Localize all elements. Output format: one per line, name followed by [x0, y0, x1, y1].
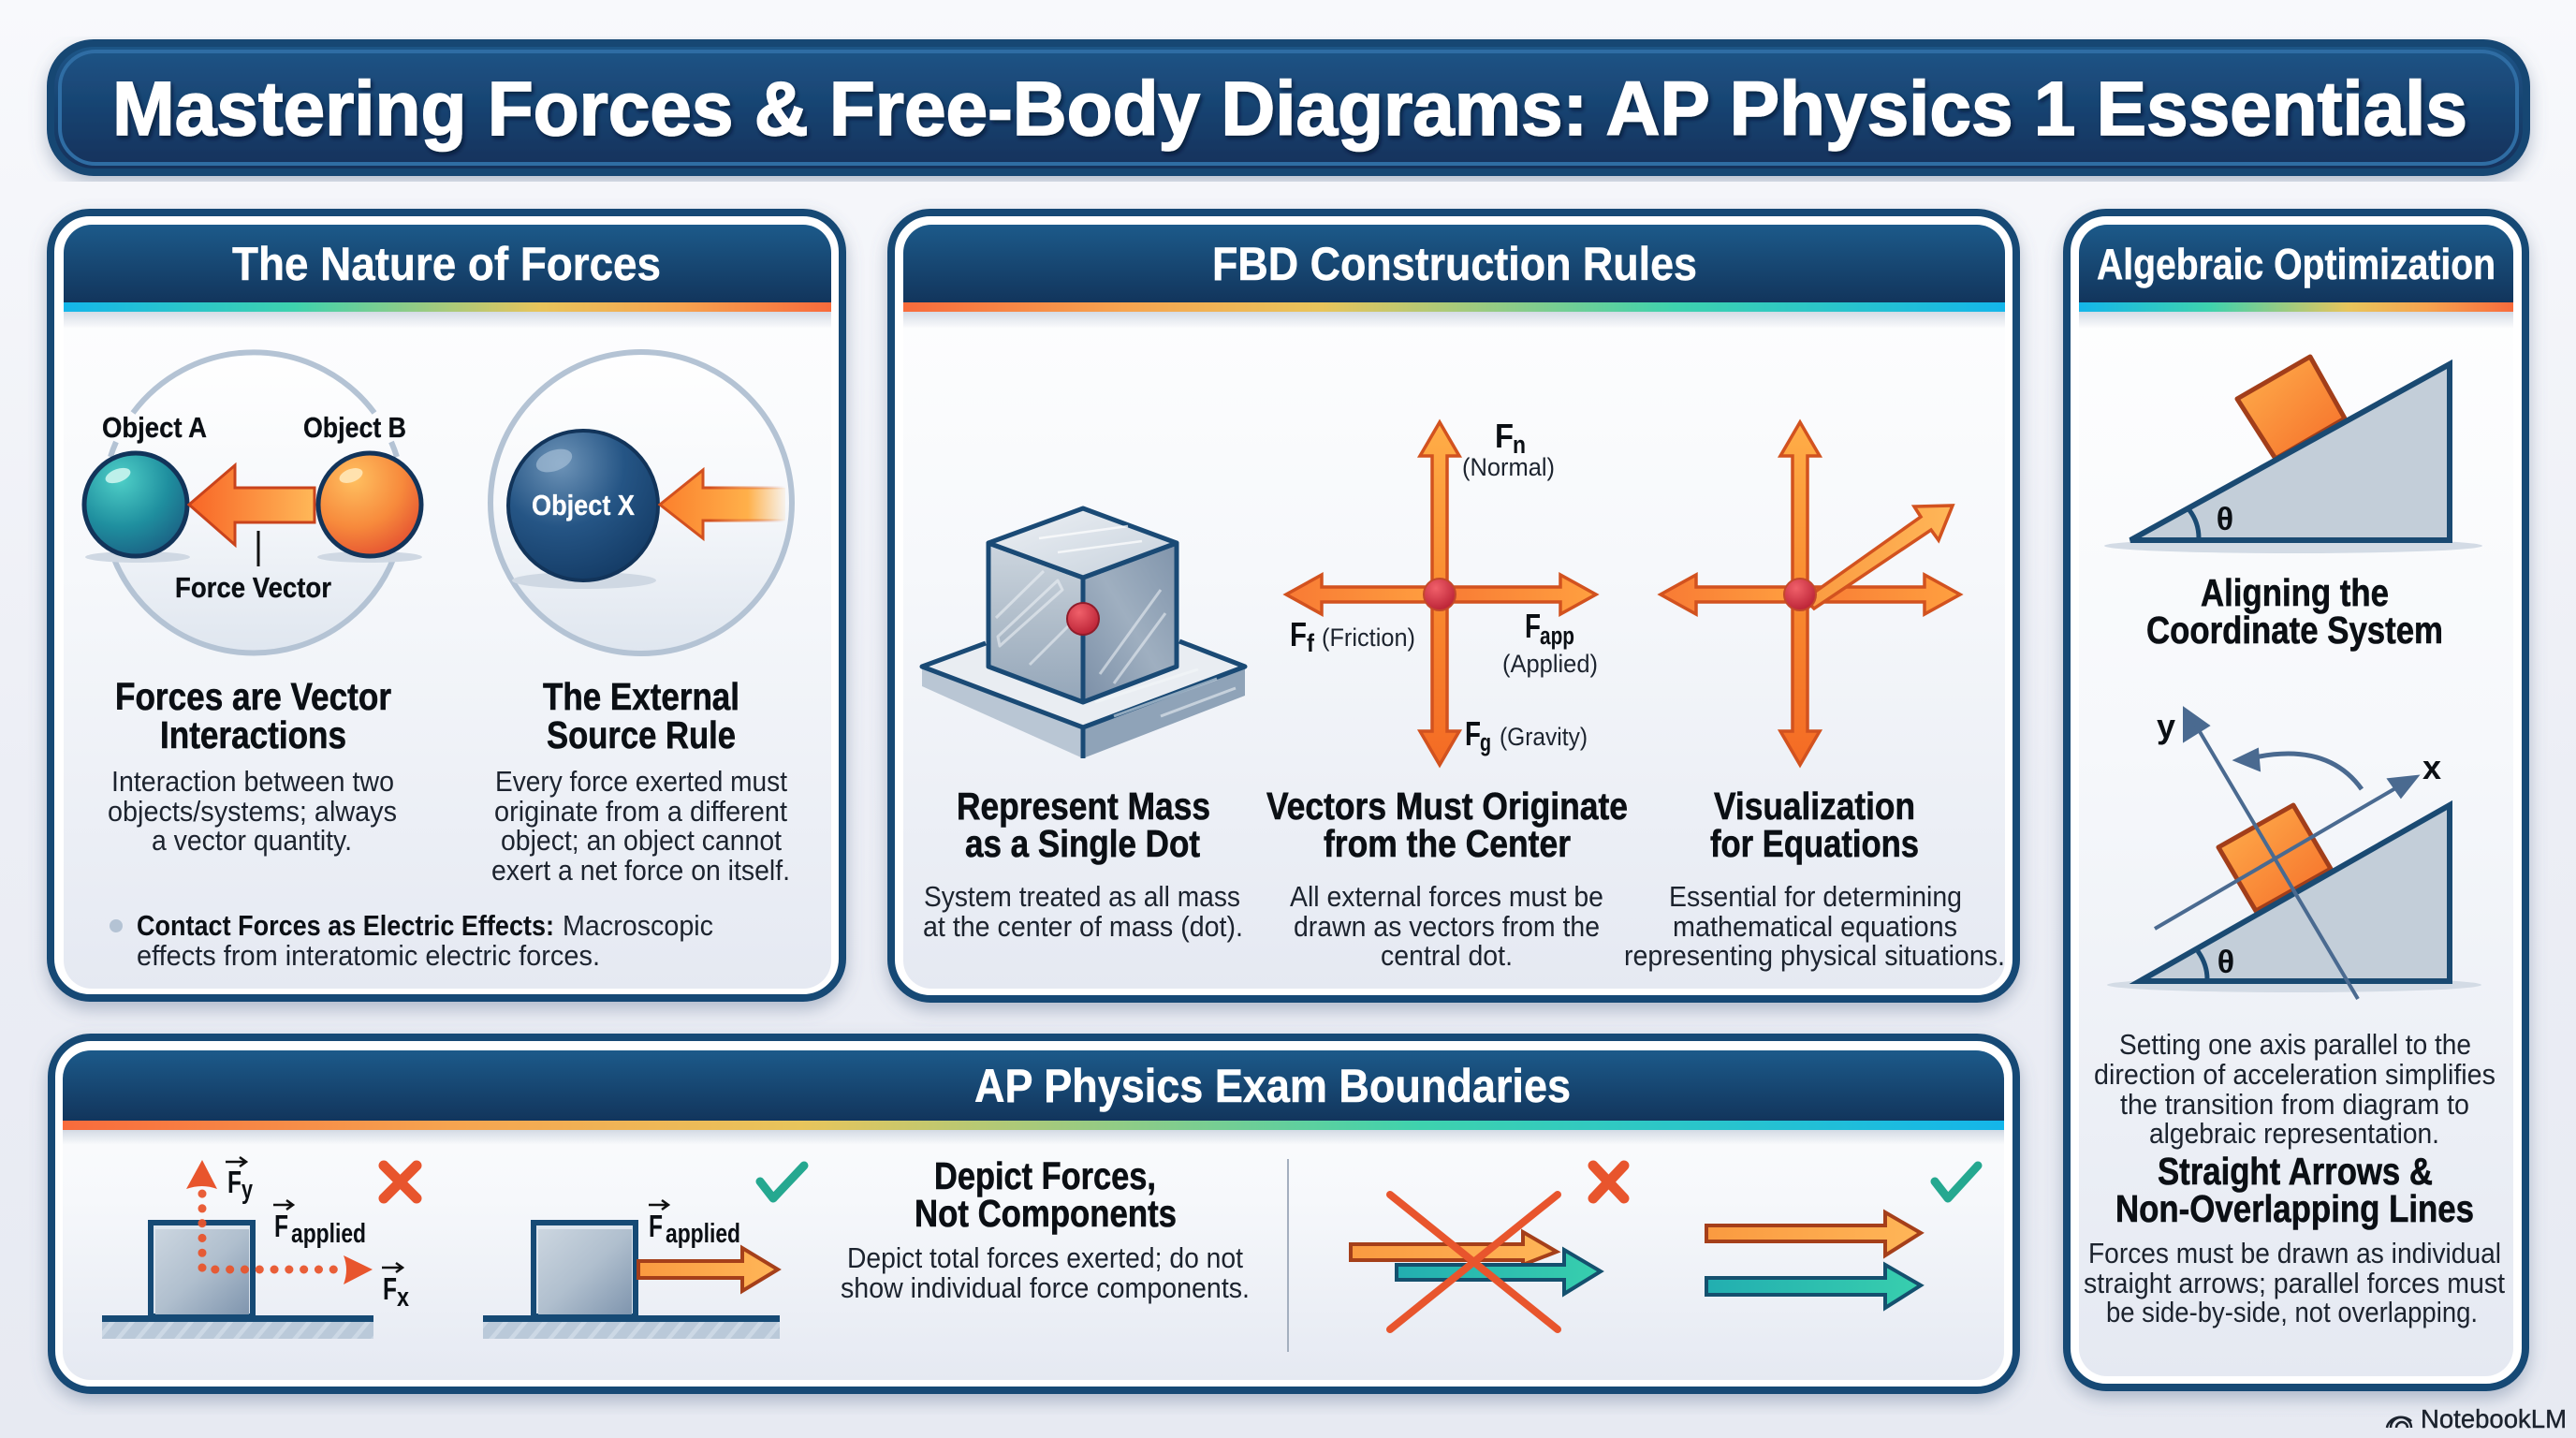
- diagram: incline with block: θ: [2217, 502, 2233, 537]
- label: gravity force: (Gravity): [1500, 723, 1588, 751]
- diagram: correct total force: [483, 1166, 804, 1339]
- text block: Forces are Vector Interactions: a vector quantity.: [152, 824, 352, 857]
- text block: Represent Mass as a Single Dot: System treated as all mass: [924, 880, 1240, 913]
- label: F applied: [649, 1200, 740, 1249]
- text block: Represent Mass as a Single Dot: at the center of mass (dot).: [923, 910, 1243, 943]
- label: friction force: (Friction): [1322, 624, 1415, 652]
- panel: AP Physics Exam Boundaries: [51, 1037, 2016, 1390]
- icon: green check: [760, 1166, 804, 1198]
- text block: The External Source Rule: Every force exerted must: [495, 765, 787, 798]
- text block: Forces are Vector Interactions: Interactions: [160, 713, 346, 756]
- label: Object B: Object B: [303, 411, 406, 444]
- label: friction force: f: [1307, 629, 1315, 657]
- text block: Visualization for Equations: for Equations: [1710, 822, 1919, 865]
- text block: axis explanation: direction of acceleration simplifies: [2094, 1058, 2496, 1091]
- watermark: NotebookLM: NotebookLM: [2421, 1404, 2567, 1433]
- arrow: normal force: [1420, 422, 1459, 594]
- arrow: external force: [660, 470, 785, 538]
- icon: sphere object A: [84, 453, 187, 556]
- label: normal force: n: [1513, 431, 1526, 459]
- arrow: friction force: [1286, 575, 1440, 614]
- text block: Forces are Vector Interactions: Interaction between two: [111, 765, 394, 798]
- panel heading: Algebraic Optimization: [2079, 225, 2513, 312]
- label: applied force: [1502, 607, 1598, 678]
- text block: Represent Mass as a Single Dot: Represent Mass: [957, 785, 1210, 828]
- text block: Vectors Must Originate from the Center: drawn as vectors from the: [1294, 910, 1600, 943]
- text block: Straight Arrows and Non-Overlapping Lines: [2084, 1150, 2505, 1328]
- diagram: incorrect force components: [102, 1157, 417, 1339]
- text block: axis explanation: the transition from diagram to: [2120, 1088, 2469, 1121]
- text block: Represent Mass as a Single Dot: [923, 785, 1243, 943]
- icon: red cross: [1593, 1166, 1624, 1198]
- label: normal force: (Normal): [1462, 453, 1555, 481]
- text block: Forces are Vector Interactions: Forces are Vector: [115, 675, 391, 718]
- text block: Depict Forces, Not Components: [841, 1154, 1250, 1304]
- arrow: force vector: [189, 465, 315, 545]
- panel heading: FBD Construction Rules: FBD Construction Rules: [1212, 238, 1697, 290]
- panel heading: The Nature of Forces: The Nature of Forces: [232, 238, 661, 290]
- diagram: overlapping arrows crossed out: [1351, 1166, 1624, 1329]
- arrow: applied force: [638, 1248, 778, 1291]
- panel heading: AP Physics Exam Boundaries: [63, 1050, 2004, 1130]
- icon: red cross: [384, 1166, 417, 1198]
- text block: Straight Arrows and Non-Overlapping Lines: Non-Overlapping Lines: [2115, 1187, 2474, 1230]
- icon: sphere object B: [318, 453, 421, 556]
- label: Object A: Object A: [102, 411, 207, 444]
- text block: Visualization for Equations: Visualization: [1714, 785, 1915, 828]
- diagram: incline with block: [2104, 357, 2482, 553]
- text block: Vectors Must Originate from the Center: from the Center: [1324, 822, 1571, 865]
- text block: Vectors Must Originate from the Center: central dot.: [1381, 939, 1513, 972]
- text block: The External Source Rule: Source Rule: [547, 713, 736, 756]
- arrow: rotation: [2234, 749, 2362, 789]
- text block: Depict Forces, Not Components: show individual force components.: [841, 1271, 1250, 1304]
- arrow: gravity force: [1420, 594, 1459, 765]
- label: F applied: F: [649, 1209, 663, 1243]
- text block: axis explanation: Setting one axis parallel to the: [2119, 1028, 2471, 1061]
- text block: Vectors Must Originate from the Center: Vectors Must Originate: [1266, 785, 1628, 828]
- icon: green check: [1935, 1166, 1978, 1198]
- text block: Vectors Must Originate from the Center: All external forces must be: [1290, 880, 1603, 913]
- text block: The External Source Rule: The External: [543, 675, 739, 718]
- arrow: y axis: [2185, 710, 2358, 999]
- bullet: contact forces as electric effects: Contact Forces as Electric Effects:: [137, 909, 554, 942]
- label: F x: F: [383, 1271, 397, 1306]
- label: F applied: applied: [666, 1219, 740, 1249]
- panel: The Nature of Forces: [51, 213, 842, 998]
- label: x axis: x: [2422, 748, 2441, 786]
- icon: sphere object X: [508, 431, 658, 580]
- bullet: contact forces as electric effects: Macroscopic: [563, 909, 713, 942]
- label: applied force: (Applied): [1502, 650, 1598, 678]
- label: F y: y: [242, 1175, 253, 1205]
- text block: axis explanation: [2094, 1028, 2496, 1150]
- label: normal force: F: [1495, 417, 1514, 455]
- text block: axis explanation: algebraic representation.: [2149, 1117, 2439, 1150]
- diagram: vectors from the center dot: [1286, 422, 1596, 765]
- panel heading: FBD Construction Rules: [903, 225, 2005, 312]
- label: friction force: F: [1290, 615, 1307, 653]
- label: applied force: app: [1540, 622, 1574, 650]
- arrow: applied force: [1440, 575, 1596, 614]
- text block: The External Source Rule: [491, 675, 790, 887]
- label: F x: x: [397, 1283, 409, 1313]
- icon: sphere object X: Object X: [532, 489, 635, 521]
- text block: Vectors Must Originate from the Center: [1266, 785, 1628, 972]
- text block: Depict Forces, Not Components: Not Components: [915, 1192, 1177, 1235]
- label: Force Vector: Force Vector: [175, 571, 331, 604]
- text block: Forces are Vector Interactions: objects/systems; always: [108, 795, 397, 828]
- text block: Visualization for Equations: Essential for determining: [1669, 880, 1962, 913]
- text block: Straight Arrows and Non-Overlapping Lines: be side-by-side, not overlapping.: [2106, 1296, 2478, 1328]
- text block: Depict Forces, Not Components: Depict total forces exerted; do not: [847, 1241, 1243, 1274]
- title banner: [51, 43, 2526, 172]
- text block: The External Source Rule: object; an object cannot: [501, 824, 782, 857]
- label: F applied: [273, 1200, 366, 1249]
- text block: The External Source Rule: exert a net force on itself.: [491, 854, 790, 887]
- label: gravity force: [1465, 714, 1588, 756]
- label: F x: [382, 1263, 409, 1313]
- panel: Algebraic Optimization: [2067, 213, 2525, 1387]
- diagram: visualization for equations: [1661, 422, 1960, 765]
- label: applied force: F: [1525, 607, 1541, 645]
- text block: Straight Arrows and Non-Overlapping Lines: Straight Arrows &: [2158, 1150, 2433, 1193]
- label: F y: [226, 1157, 253, 1205]
- panel heading: The Nature of Forces: [64, 225, 831, 312]
- bullet: contact forces as electric effects: effects from interatomic electric forces.: [137, 939, 600, 972]
- icon: center dot: [1424, 579, 1456, 610]
- label: F y: F: [227, 1165, 242, 1199]
- label: F applied: applied: [291, 1219, 366, 1249]
- heading: Aligning the Coordinate System: Aligning the: [2201, 571, 2389, 614]
- icon: cube on slab with center dot: [922, 508, 1245, 758]
- heading: Aligning the Coordinate System: [2146, 571, 2443, 652]
- label: friction force: [1290, 615, 1415, 657]
- diagram: rotated coordinate axes on incline: θ: [2217, 945, 2234, 980]
- diagram: side-by-side arrows: [1706, 1166, 1978, 1308]
- panel heading: Algebraic Optimization: Algebraic Optimization: [2097, 240, 2496, 288]
- arrow: x axis: [2155, 777, 2416, 929]
- label: normal force: [1462, 417, 1555, 481]
- label: F applied: F: [274, 1209, 288, 1243]
- label: y axis: y: [2157, 707, 2175, 745]
- bullet: contact forces as electric effects: [110, 909, 713, 972]
- text block: Visualization for Equations: mathematical equations: [1673, 910, 1957, 943]
- text block: The External Source Rule: originate from a different: [494, 795, 787, 828]
- label: gravity force: g: [1480, 728, 1491, 756]
- panel: FBD Construction Rules: [891, 213, 2016, 999]
- diagram: rotated coordinate axes on incline: [2107, 707, 2481, 999]
- diagram: external source on object X: [490, 352, 792, 653]
- heading: Aligning the Coordinate System: Coordinate System: [2146, 609, 2443, 652]
- text block: Visualization for Equations: [1624, 785, 2005, 972]
- text block: Straight Arrows and Non-Overlapping Lines: straight arrows; parallel forces must: [2084, 1267, 2505, 1299]
- text block: Forces are Vector Interactions: [108, 675, 397, 857]
- text block: Straight Arrows and Non-Overlapping Lines: Forces must be drawn as individual: [2088, 1237, 2501, 1269]
- label: gravity force: F: [1465, 714, 1481, 753]
- text block: Visualization for Equations: representing physical situations.: [1624, 939, 2005, 972]
- text block: Represent Mass as a Single Dot: as a Single Dot: [965, 822, 1200, 865]
- title banner: Mastering Forces & Free-Body Diagrams: AP Physics 1 Essentials: [112, 66, 2467, 152]
- text block: Depict Forces, Not Components: Depict Forces,: [934, 1154, 1156, 1197]
- panel heading: AP Physics Exam Boundaries: AP Physics Exam Boundaries: [974, 1060, 1571, 1112]
- diagram: force between object A and object B: [84, 352, 422, 653]
